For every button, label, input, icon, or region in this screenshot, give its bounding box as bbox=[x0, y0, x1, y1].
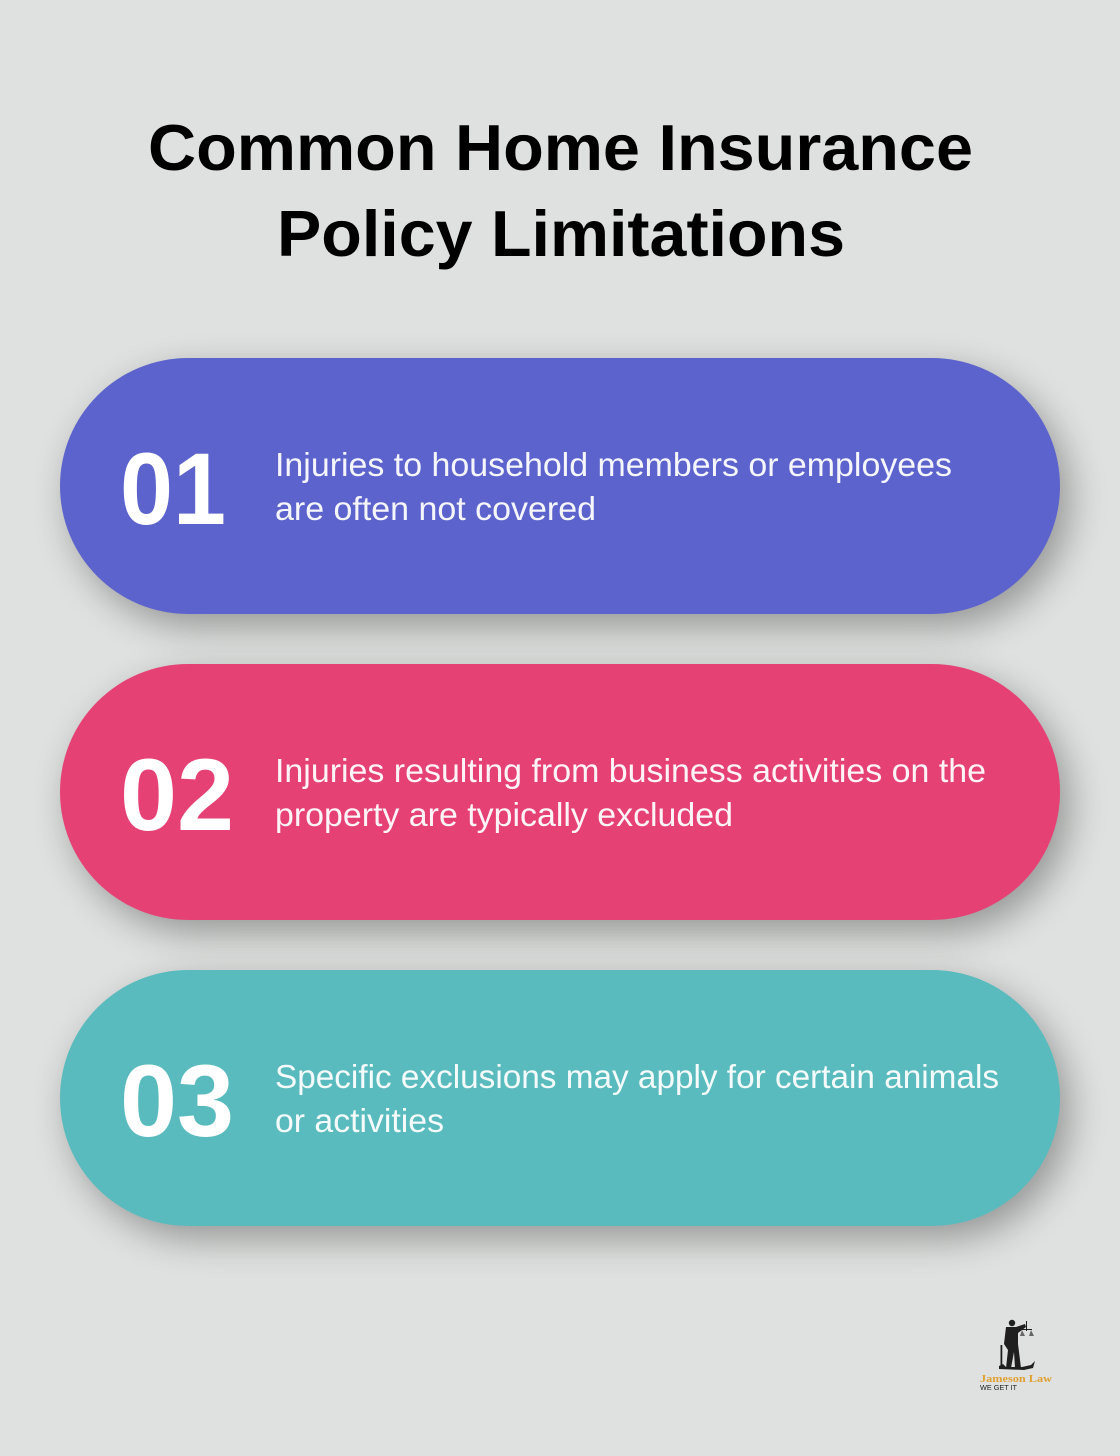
text: item 1 description: are often not covered bbox=[275, 490, 596, 527]
text: item 2 description bbox=[275, 752, 986, 833]
panel: item 3 pill bbox=[60, 970, 1060, 1226]
text: item 2 description: property are typically excluded bbox=[275, 796, 733, 833]
text: item 2 description: Injuries resulting from business activities on the bbox=[275, 752, 986, 789]
title: Common Home Insurance bbox=[148, 111, 973, 184]
title bbox=[148, 111, 973, 270]
panel: item 2 pill bbox=[60, 664, 1060, 920]
number 03: 03 bbox=[120, 1044, 234, 1158]
number 02: 02 bbox=[120, 738, 234, 852]
title: Policy Limitations bbox=[277, 197, 845, 270]
icon: lady justice figure bbox=[999, 1320, 1035, 1370]
text: item 1 description bbox=[275, 446, 952, 527]
text: item 1 description: Injuries to household members or employees bbox=[275, 446, 952, 483]
number 01: 01 bbox=[120, 432, 226, 546]
text: tagline: WE GET IT bbox=[980, 1385, 1018, 1392]
panel: item 1 pill bbox=[60, 358, 1060, 614]
text: item 3 description bbox=[275, 1058, 999, 1139]
text: item 3 description: Specific exclusions may apply for certain animals bbox=[275, 1058, 999, 1095]
text: item 3 description: or activities bbox=[275, 1102, 444, 1139]
logo: Jameson Law bbox=[980, 1320, 1052, 1392]
text: firm name: Jameson Law bbox=[980, 1373, 1052, 1385]
